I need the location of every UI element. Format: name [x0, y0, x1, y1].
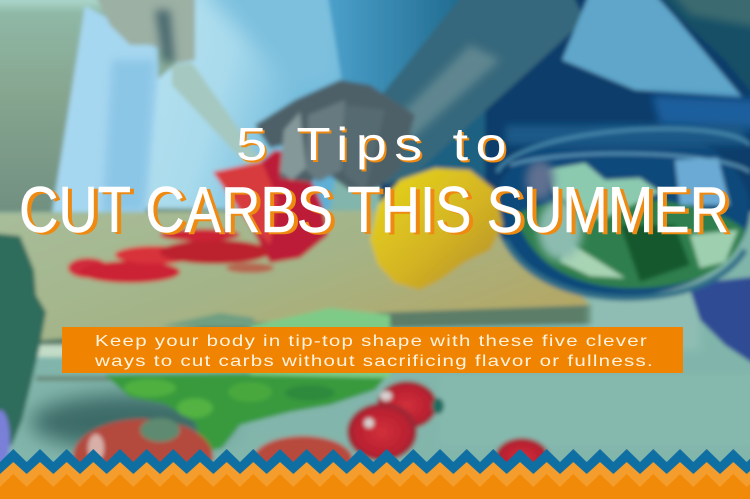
subtitle text: Keep your body in tip-top shape with these five clever — [95, 333, 648, 350]
knife hand — [88, 0, 195, 63]
knife blade — [172, 63, 282, 197]
purple cabbage bottom left — [0, 410, 10, 470]
orange box — [62, 327, 683, 373]
right hand — [255, 80, 415, 190]
kale left — [0, 232, 46, 455]
pepper slices — [68, 229, 274, 283]
table shadow — [30, 394, 230, 450]
zigzag border — [0, 440, 750, 499]
red pepper — [213, 150, 328, 263]
dark back of scene — [380, 0, 750, 215]
subtitle text — [94, 333, 654, 370]
cutting board — [0, 210, 592, 345]
table — [0, 212, 750, 499]
center shirt — [140, 0, 345, 210]
subtitle banner — [62, 327, 683, 373]
subtitle text: ways to cut carbs without sacrificing flavor or fullness. — [94, 353, 654, 370]
right sleeve — [325, 0, 480, 125]
left shirt panel — [52, 6, 158, 214]
title line 1: 5 Tips to: 5 Tips to — [236, 118, 514, 170]
bowl — [494, 124, 750, 298]
right white shirt — [562, 0, 742, 97]
title — [19, 118, 733, 248]
tomatoes — [73, 381, 549, 495]
wall — [0, 0, 280, 215]
title line 1: 5 Tips to: 5 Tips to — [238, 120, 516, 172]
yellow pepper — [370, 168, 503, 290]
purple cabbage right — [690, 275, 750, 375]
lettuce — [105, 308, 390, 452]
forearm — [375, 0, 585, 185]
table wood tones — [440, 375, 750, 445]
